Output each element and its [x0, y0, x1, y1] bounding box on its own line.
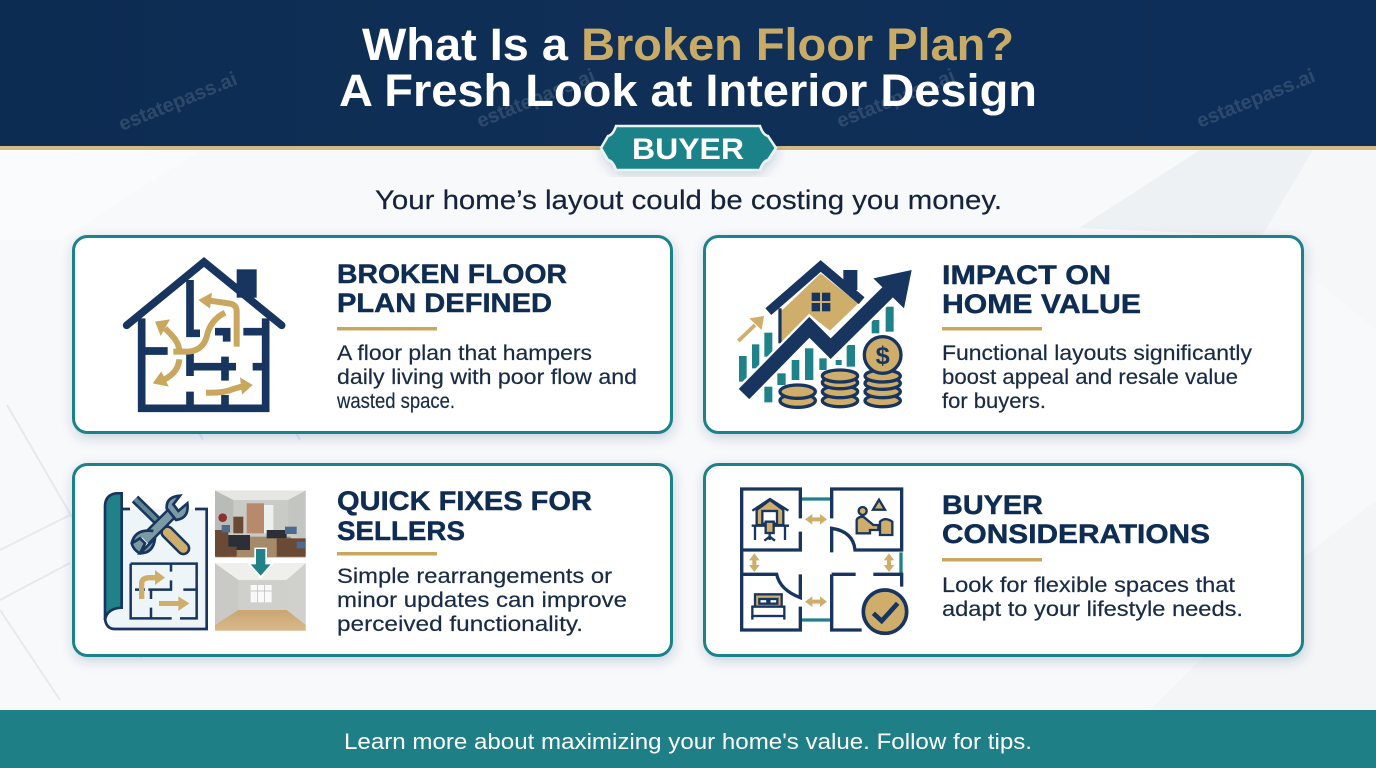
icon: home office [752, 499, 789, 541]
body text: Simple rearrangements or [337, 565, 612, 588]
icon: bed [752, 594, 784, 620]
subtitle: Your home’s layout could be costing you money. [375, 185, 1002, 215]
title: A Fresh Look at Interior Design [339, 65, 1037, 116]
heading: QUICK FIXES FOR [337, 486, 592, 516]
icon: flexible floor plan [742, 489, 910, 636]
header band: estatepass.ai [834, 65, 958, 133]
heading: BUYER [942, 490, 1043, 520]
heading [337, 486, 592, 546]
heading [337, 259, 567, 318]
header band [0, 0, 1376, 150]
heading: CONSIDERATIONS [942, 519, 1210, 549]
footer band [0, 710, 1376, 768]
panel: buyer considerations [704, 464, 1302, 656]
photo: clean room [215, 563, 306, 631]
body text [336, 342, 637, 413]
body text [337, 565, 627, 636]
body text [942, 342, 1253, 413]
body text: A floor plan that hampers [337, 342, 592, 365]
icon: house with tangled arrows [127, 262, 282, 408]
body text: Functional layouts significantly [942, 342, 1253, 365]
header band: estatepass.ai [1194, 65, 1318, 133]
body text: for buyers. [942, 390, 1046, 413]
body text [942, 574, 1243, 621]
panel: impact on home value [704, 236, 1302, 432]
badge: buyer: BUYER [632, 133, 744, 166]
heading: HOME VALUE [942, 289, 1141, 319]
icon: blueprint and tools [105, 493, 207, 629]
heading [942, 260, 1141, 319]
icon: person with shapes [857, 500, 892, 535]
title: What Is a Broken Floor Plan? [362, 19, 1014, 70]
heading [942, 490, 1210, 549]
title [339, 19, 1037, 116]
header band: estatepass.ai [116, 68, 240, 136]
body text: boost appeal and resale value [942, 366, 1238, 389]
icon: rising house value chart [738, 266, 912, 407]
heading: SELLERS [337, 516, 465, 546]
page background [0, 150, 1376, 710]
body text: adapt to your lifestyle needs. [942, 598, 1243, 621]
panel: broken floor plan defined [74, 236, 672, 432]
body text: wasted space. [336, 390, 455, 413]
header band: estatepass.ai [474, 65, 598, 133]
badge: buyer [601, 126, 776, 170]
heading: IMPACT ON [942, 260, 1111, 290]
arrow: before to after [247, 548, 274, 579]
body text: perceived functionality. [337, 613, 583, 636]
heading: BROKEN FLOOR [337, 259, 567, 289]
body text: daily living with poor flow and [337, 366, 637, 389]
footer band: Learn more about maximizing your home's value. Follow for tips. [344, 729, 1032, 754]
body text: Look for flexible spaces that [942, 574, 1235, 597]
icon: checkmark [860, 587, 910, 636]
heading: PLAN DEFINED [337, 288, 552, 318]
panel: quick fixes for sellers [74, 464, 672, 656]
icon: rising house value chart: $ [876, 342, 890, 370]
body text: minor updates can improve [337, 589, 627, 612]
photo: cluttered room [215, 491, 306, 557]
